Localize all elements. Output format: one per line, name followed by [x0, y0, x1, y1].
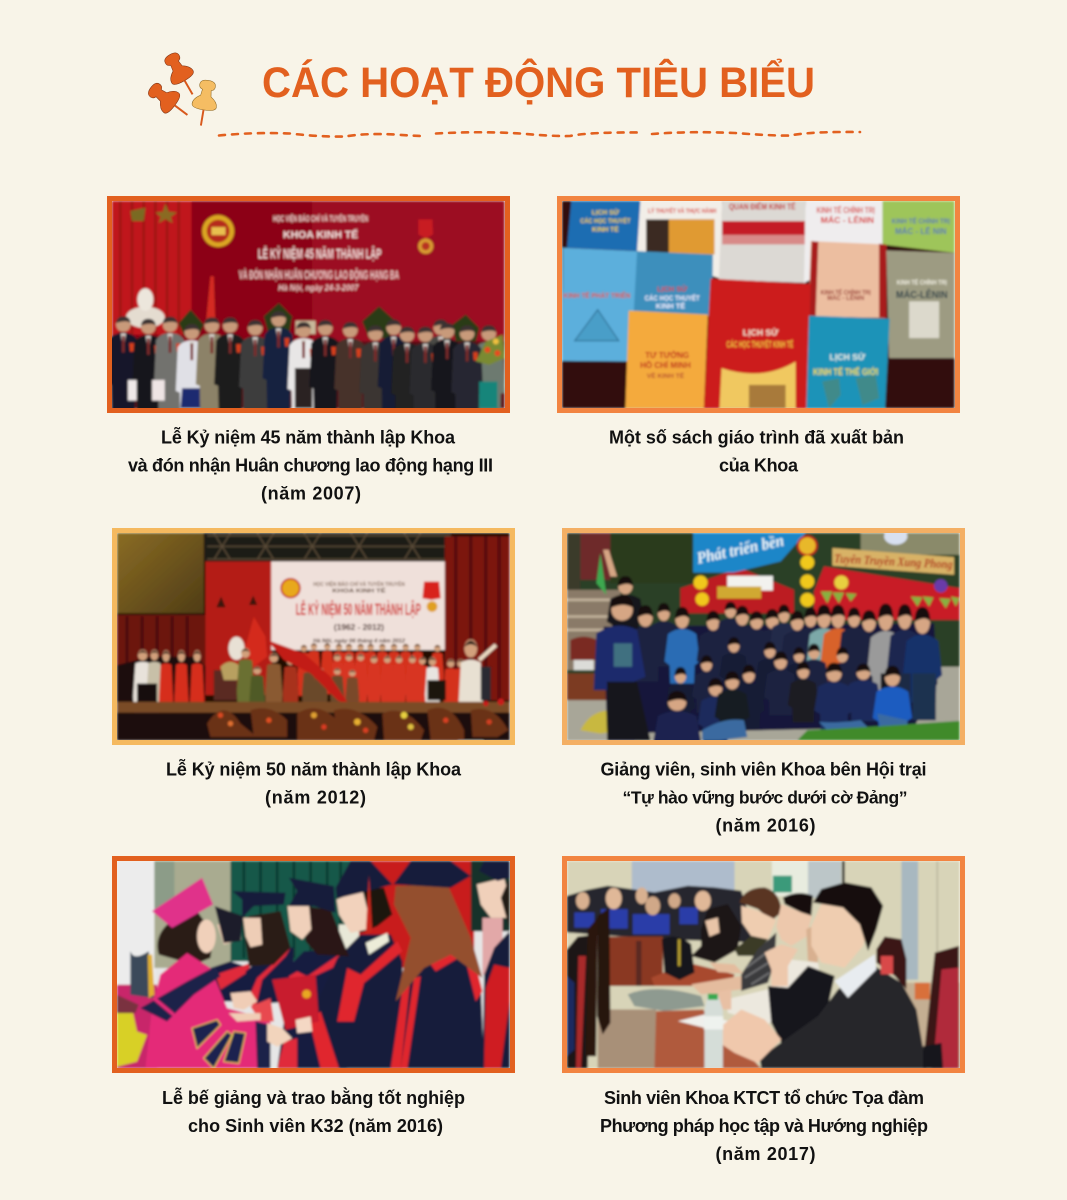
Hands and diploma: [230, 991, 257, 1010]
caption: Lễ Kỷ niệm 45 năm thành lập Khoa: [161, 426, 456, 447]
photo: students at seminar table: [562, 856, 964, 1073]
Faces and hair: [245, 911, 291, 966]
panel: graduation ceremony: [112, 856, 515, 1136]
panel: 45th anniversary: [107, 196, 510, 504]
Robes: [210, 961, 251, 1001]
caption: và đón nhận Huân chương lao động hạng III: [128, 455, 493, 475]
caption: (năm 2017): [716, 1144, 816, 1164]
photo: anniversary group on stage: KHOA KINH TẾ: [283, 227, 358, 240]
caption: Sinh viên Khoa KTCT tổ chức Tọa đàm: [604, 1088, 924, 1108]
photo: stage performance: KHOA KINH TẾ: [332, 587, 387, 594]
photo: textbooks on table: LỊCH SỬ: [592, 207, 620, 216]
photo: textbooks on table: MÁC-LÊNIN: [896, 287, 948, 300]
photo: textbooks on table: KINH TẾ PHÁT TRIỂN: [564, 289, 630, 299]
photo: textbooks on table: TƯ TƯỞNG: [645, 351, 689, 360]
photo: textbooks on table: MÁC - LÊNIN: [827, 293, 864, 301]
Caps: [232, 891, 286, 918]
photo: anniversary group on stage: HỌC VIỆN BÁO CHÍ VÀ TUYÊN TRUYỀN: [273, 212, 368, 223]
caption: Lễ Kỷ niệm 50 năm thành lập Khoa: [166, 758, 462, 779]
photo: textbooks on table: MÁC - LÊ NIN: [895, 226, 947, 235]
header: pin icons, title and dashed divider: [148, 52, 862, 138]
caption: Một số sách giáo trình đã xuất bản: [609, 427, 904, 447]
panel: career seminar: [562, 856, 965, 1164]
photo: textbooks on table: KINH TẾ: [592, 223, 619, 233]
photo: textbooks on table: CÁC HỌC THUYẾT: [580, 215, 630, 225]
photo: textbooks on table: CÁC HỌC THUYẾT KINH TẾ: [727, 339, 793, 349]
panel: 50th anniversary: [112, 528, 515, 808]
photo: stage performance: (1962 - 2012): [334, 622, 384, 631]
caption: [609, 427, 904, 475]
photo: textbooks on table: KINH TẾ CHÍNH TRỊ: [816, 205, 875, 215]
icon: three push pins: [143, 49, 221, 128]
caption: cho Sinh viên K32 (năm 2016): [188, 1116, 443, 1136]
photo: textbooks on table: CÁC HỌC THUYẾT: [645, 292, 700, 302]
caption: “Tự hào vững bước dưới cờ Đảng”: [622, 787, 908, 807]
photo: textbooks on table: VỀ KINH TẾ: [647, 370, 685, 380]
photo: textbooks on table: LÝ THUYẾT VÀ THỰC HÀNH: [648, 205, 716, 215]
caption: của Khoa: [719, 455, 799, 475]
caption: Phương pháp học tập và Hướng nghiệp: [600, 1116, 928, 1136]
photo: textbooks on table: KINH TẾ THẾ GIỚI: [813, 365, 878, 376]
photo: textbooks on table: HỒ CHÍ MINH: [640, 360, 691, 370]
caption: Giảng viên, sinh viên Khoa bên Hội trại: [600, 759, 926, 779]
panel: published textbooks: [557, 196, 960, 475]
photo: anniversary group on stage: [107, 196, 510, 413]
photo: textbooks on table: LỊCH SỬ: [657, 284, 688, 293]
photo: textbooks on table: QUAN ĐIỂM KINH TẾ: [729, 200, 796, 211]
caption: [600, 1088, 928, 1164]
photo: stage performance: Hà Nội, ngày 06 tháng 4 năm 2012: [313, 638, 405, 644]
photo: textbooks on table: LỊCH SỬ: [743, 326, 779, 337]
caption: [166, 758, 462, 808]
photo: anniversary group on stage: Hà Nội, ngày 24-3-2007: [278, 283, 359, 292]
photo: lecturers and students at camp: [562, 528, 964, 745]
photo: stage performance: HỌC VIỆN BÁO CHÍ VÀ TUYÊN TRUYỀN: [313, 579, 405, 587]
photo: graduates receiving diplomas: [112, 856, 514, 1073]
photo: textbooks on table: KINH TẾ: [656, 300, 685, 310]
caption: [600, 759, 926, 836]
photo: anniversary group on stage: LỄ KỶ NIỆM 45 NĂM THÀNH LẬP: [258, 244, 381, 261]
caption: (năm 2016): [716, 815, 816, 835]
title: CÁC HOẠT ĐỘNG TIÊU BIỂU: [262, 58, 815, 107]
photo: textbooks on table: MÁC - LÊNIN: [821, 214, 874, 225]
photo: stage performance: [112, 528, 514, 745]
Professor: [157, 911, 214, 965]
caption: [162, 1087, 465, 1136]
caption: (năm 2007): [261, 483, 361, 503]
caption: [128, 426, 493, 504]
photo: textbooks on table: KINH TẾ CHÍNH TRỊ: [821, 286, 871, 296]
photo: textbooks on table: LỊCH SỬ: [830, 350, 866, 361]
caption: (năm 2012): [265, 787, 366, 807]
caption: Lễ bế giảng và trao bằng tốt nghiệp: [162, 1087, 465, 1108]
photo: textbooks on table: [557, 196, 960, 413]
panel: student camp: [562, 528, 965, 836]
